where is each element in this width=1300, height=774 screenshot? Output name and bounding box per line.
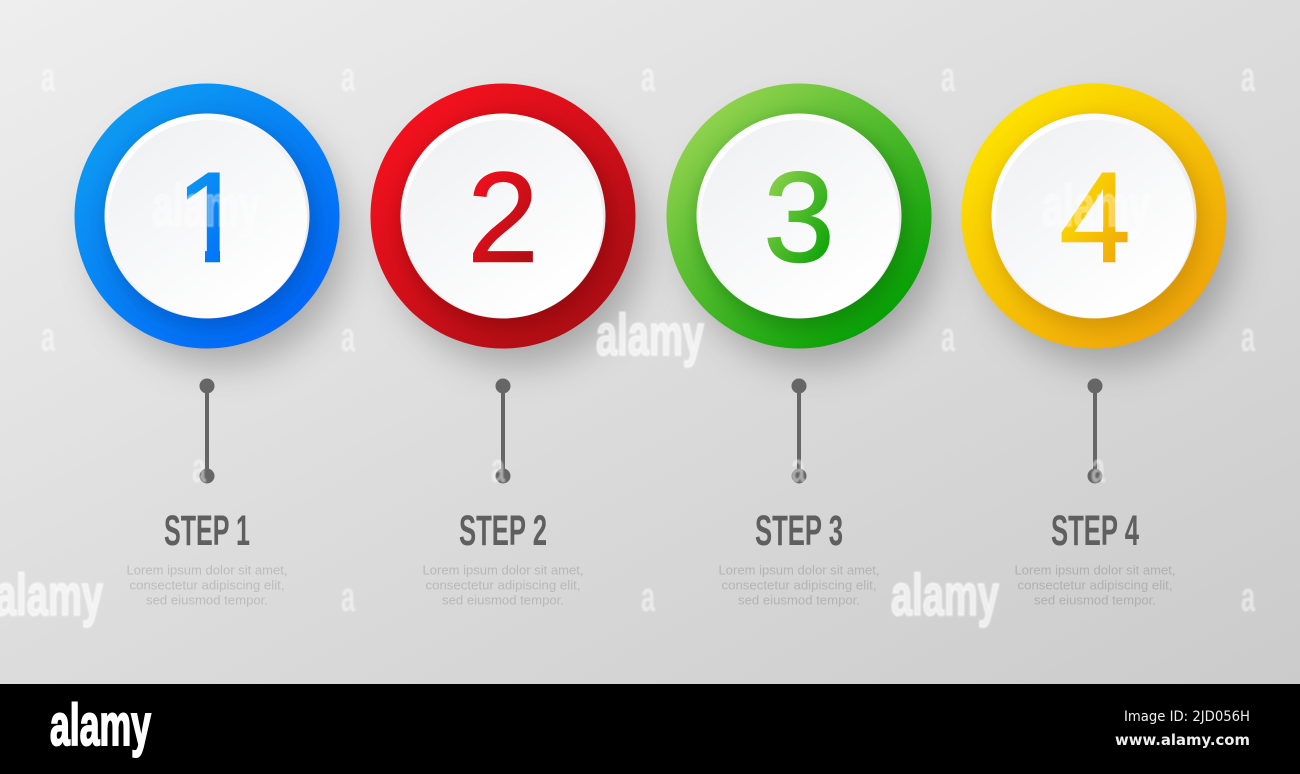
step 2 description: sed eiusmod tempor. [442,594,564,608]
watermark: marks beside connector dots: a [791,444,805,491]
connector 4 [1088,378,1102,484]
footer image id: Image ID: 2JD056H [1124,709,1250,725]
watermark: small repeated marks: a [641,573,655,620]
watermark: marks beside connector dots: a [491,444,505,491]
watermark: large marks: alamy [891,563,999,628]
watermark: small repeated marks: a [341,53,355,100]
step 2 description [422,564,584,608]
step 3 badge [666,84,941,366]
step 4 description [1014,564,1176,608]
watermark: small repeated marks [41,53,1255,620]
number 3: 3 [763,146,835,290]
step 1 description [126,564,288,608]
step 3 description: sed eiusmod tempor. [738,594,860,608]
watermark: large marks [0,174,1150,628]
watermark: marks beside connector dots: a [192,444,206,491]
step 4 description: Lorem ipsum dolor sit amet, [1014,564,1176,578]
step 2 heading: STEP 2 [459,507,547,555]
step 2 description: Lorem ipsum dolor sit amet, [422,564,584,578]
watermark: small repeated marks: a [341,573,355,620]
watermark: large marks: alamy [1042,174,1150,239]
step 4 description: consectetur adipiscing elit, [1018,578,1172,592]
footer url: www.alamy.com [1115,731,1250,749]
number 1: 1 [175,146,247,290]
connector 2 [496,378,510,484]
number 4: 4 [1059,146,1131,290]
connector 1 [200,378,214,484]
watermark: marks beside connector dots: a [1091,444,1105,491]
watermark: small repeated marks: a [41,313,55,360]
step 4 description: sed eiusmod tempor. [1034,594,1156,608]
step 3 heading: STEP 3 [755,507,843,555]
step 2 description: consectetur adipiscing elit, [426,578,580,592]
watermark: large marks: alamy [596,303,704,368]
watermark: small repeated marks: a [341,313,355,360]
watermark: small repeated marks: a [941,313,955,360]
watermark: small repeated marks: a [1241,53,1255,100]
footer logo: alamy [50,693,151,758]
watermark: small repeated marks: a [41,53,55,100]
watermark: small repeated marks: a [1241,313,1255,360]
step 3 description: Lorem ipsum dolor sit amet, [718,564,880,578]
watermark: large marks: alamy [152,174,260,239]
step 4 badge [962,84,1236,366]
step 1 heading: STEP 1 [164,507,250,555]
connector 3 [792,378,806,484]
step 3 description: consectetur adipiscing elit, [722,578,876,592]
watermark: small repeated marks: a [641,53,655,100]
step 1 description: Lorem ipsum dolor sit amet, [126,564,288,578]
step 3 description [718,564,880,608]
watermark: small repeated marks: a [1241,573,1255,620]
step 1 description: sed eiusmod tempor. [146,594,268,608]
step 4 heading: STEP 4 [1051,507,1139,555]
watermark: marks beside connector dots [192,444,1105,491]
step 2 badge [370,84,645,366]
step 1 description: consectetur adipiscing elit, [130,578,284,592]
footer bar [0,684,1300,774]
number 2: 2 [467,146,539,290]
step 1 badge [74,84,349,366]
watermark: small repeated marks: a [941,53,955,100]
